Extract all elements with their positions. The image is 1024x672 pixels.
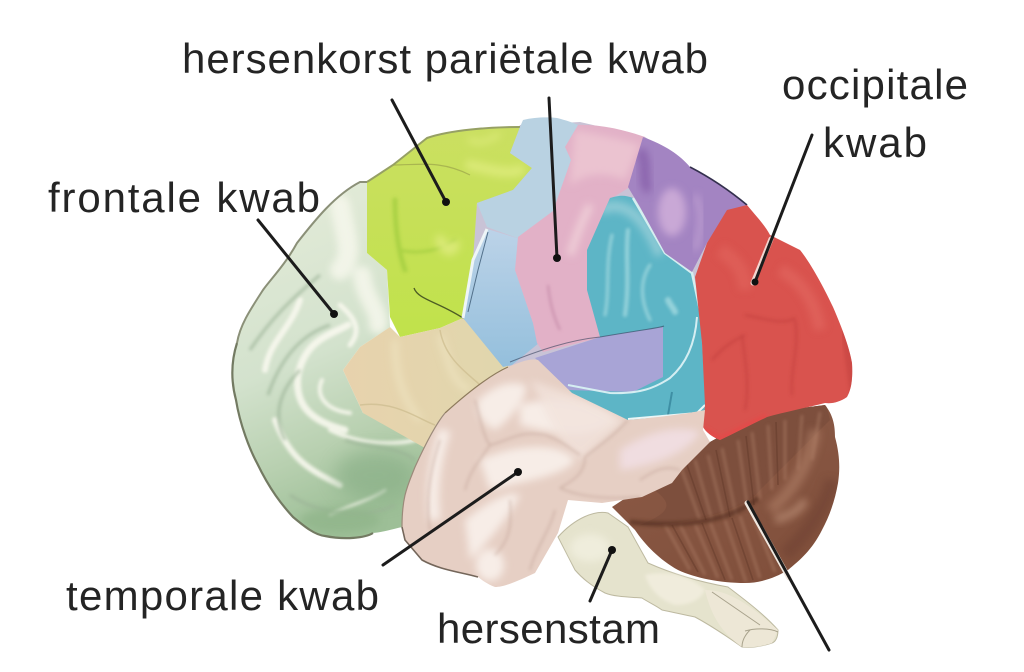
teal region	[569, 196, 705, 420]
cerebellum	[612, 405, 840, 583]
pointer: occipital halo	[753, 239, 771, 283]
brainstem	[558, 512, 778, 647]
pointer: parietal	[392, 100, 446, 202]
pointer: occipital	[755, 135, 812, 282]
tan region	[343, 318, 509, 448]
label: occipitale kwab	[782, 61, 968, 166]
frontal lobe	[231, 181, 424, 540]
light blue region	[463, 117, 582, 367]
temporal lobe	[395, 355, 720, 595]
pointer: frontal	[258, 220, 334, 314]
occipital lobe	[695, 205, 852, 440]
pointer dots	[330, 198, 758, 554]
lavender region	[510, 317, 697, 393]
pointer: temporal	[383, 472, 518, 565]
pointer lines	[258, 98, 829, 650]
pointer: brainstem	[590, 550, 612, 601]
purple region	[628, 137, 748, 272]
premotor lobe (yellow-green)	[366, 126, 532, 337]
label: temporale kwab: temporale kwab	[66, 572, 379, 619]
label: occipitale kwab: occipitale	[782, 61, 968, 108]
pointer: cerebellum	[748, 502, 829, 650]
label: hersenstam: hersenstam	[437, 605, 660, 652]
backdrop	[463, 122, 747, 425]
label: occipitale kwab: kwab	[823, 119, 927, 166]
pink region	[515, 125, 645, 352]
pointer: cerebellum halo	[747, 503, 789, 578]
pointer: parietal 2	[549, 98, 557, 258]
brain	[225, 117, 860, 647]
label: frontale kwab: frontale kwab	[48, 174, 320, 221]
label: hersenkorst pariëtale kwab: hersenkorst pariëtale kwab	[182, 35, 708, 82]
